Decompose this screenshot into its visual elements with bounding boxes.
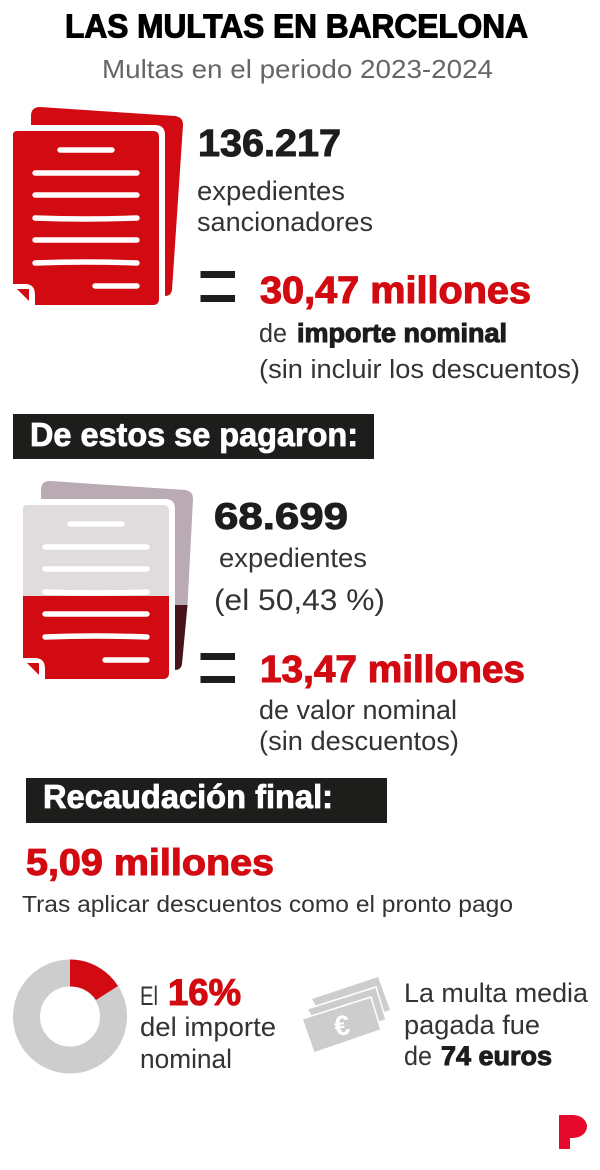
label: expedientes sancionadores: sancionadores <box>197 207 373 237</box>
amount: 5,09 millones: 5,09 millones <box>26 842 274 883</box>
text: multa media 74 euros: pagada fue <box>404 1010 540 1040</box>
amount: 30,47 millones: 30,47 millones <box>260 270 531 312</box>
text: 16% del importe nominal: 16% <box>168 972 241 1013</box>
label: expedientes el 50,43 %: expedientes <box>219 543 367 573</box>
label: importe nominal: (sin incluir los descuentos) <box>259 356 580 384</box>
label: expedientes sancionadores: expedientes <box>197 176 345 206</box>
text: multa media 74 euros: de <box>404 1041 432 1071</box>
label: expedientes el 50,43 % <box>214 543 385 617</box>
title: LAS MULTAS EN BARCELONA <box>65 8 528 44</box>
label: valor nominal: de valor nominal <box>259 695 457 725</box>
icon: partly filled documents <box>23 481 193 679</box>
text: multa media 74 euros <box>404 978 588 1071</box>
heading band: Recaudacion final: Recaudación final: <box>43 778 333 815</box>
equals sign 1 <box>200 271 235 302</box>
heading band: De estos se pagaron: De estos se pagaron: <box>30 416 358 453</box>
text: 16% del importe nominal: del importe <box>140 1012 276 1042</box>
logo: P <box>559 1115 587 1149</box>
text: 16% del importe nominal: nominal <box>140 1044 232 1074</box>
text: multa media 74 euros: La multa media <box>404 978 588 1008</box>
label: valor nominal <box>259 695 459 756</box>
subtitle: Multas en el periodo 2023-2024 <box>102 54 493 84</box>
label: valor nominal: (sin descuentos) <box>259 726 459 756</box>
equals sign 2 <box>200 653 235 683</box>
label: importe nominal <box>259 320 580 384</box>
label: importe nominal: importe nominal <box>297 320 507 348</box>
text: multa media 74 euros: 74 euros <box>441 1041 552 1071</box>
label: expedientes el 50,43 %: (el 50,43 %) <box>214 584 385 617</box>
note: tras aplicar descuentos: Tras aplicar descuentos como el pronto pago <box>22 891 513 917</box>
text: 16% del importe nominal: El <box>140 981 158 1011</box>
amount: 13,47 millones: 13,47 millones <box>260 649 525 691</box>
icon: red documents <box>13 107 183 305</box>
icon: banknotes: € <box>332 1009 352 1042</box>
icon: banknotes <box>302 977 390 1053</box>
stat: 68.699: 68.699 <box>214 496 348 537</box>
stat: 136.217: 136.217 <box>198 123 341 165</box>
label: expedientes sancionadores <box>197 176 373 237</box>
text: 16% del importe nominal <box>140 972 276 1074</box>
donut chart: 16% <box>26 960 118 1060</box>
heading band: Recaudacion final <box>26 778 387 823</box>
label: importe nominal: de <box>259 320 287 348</box>
